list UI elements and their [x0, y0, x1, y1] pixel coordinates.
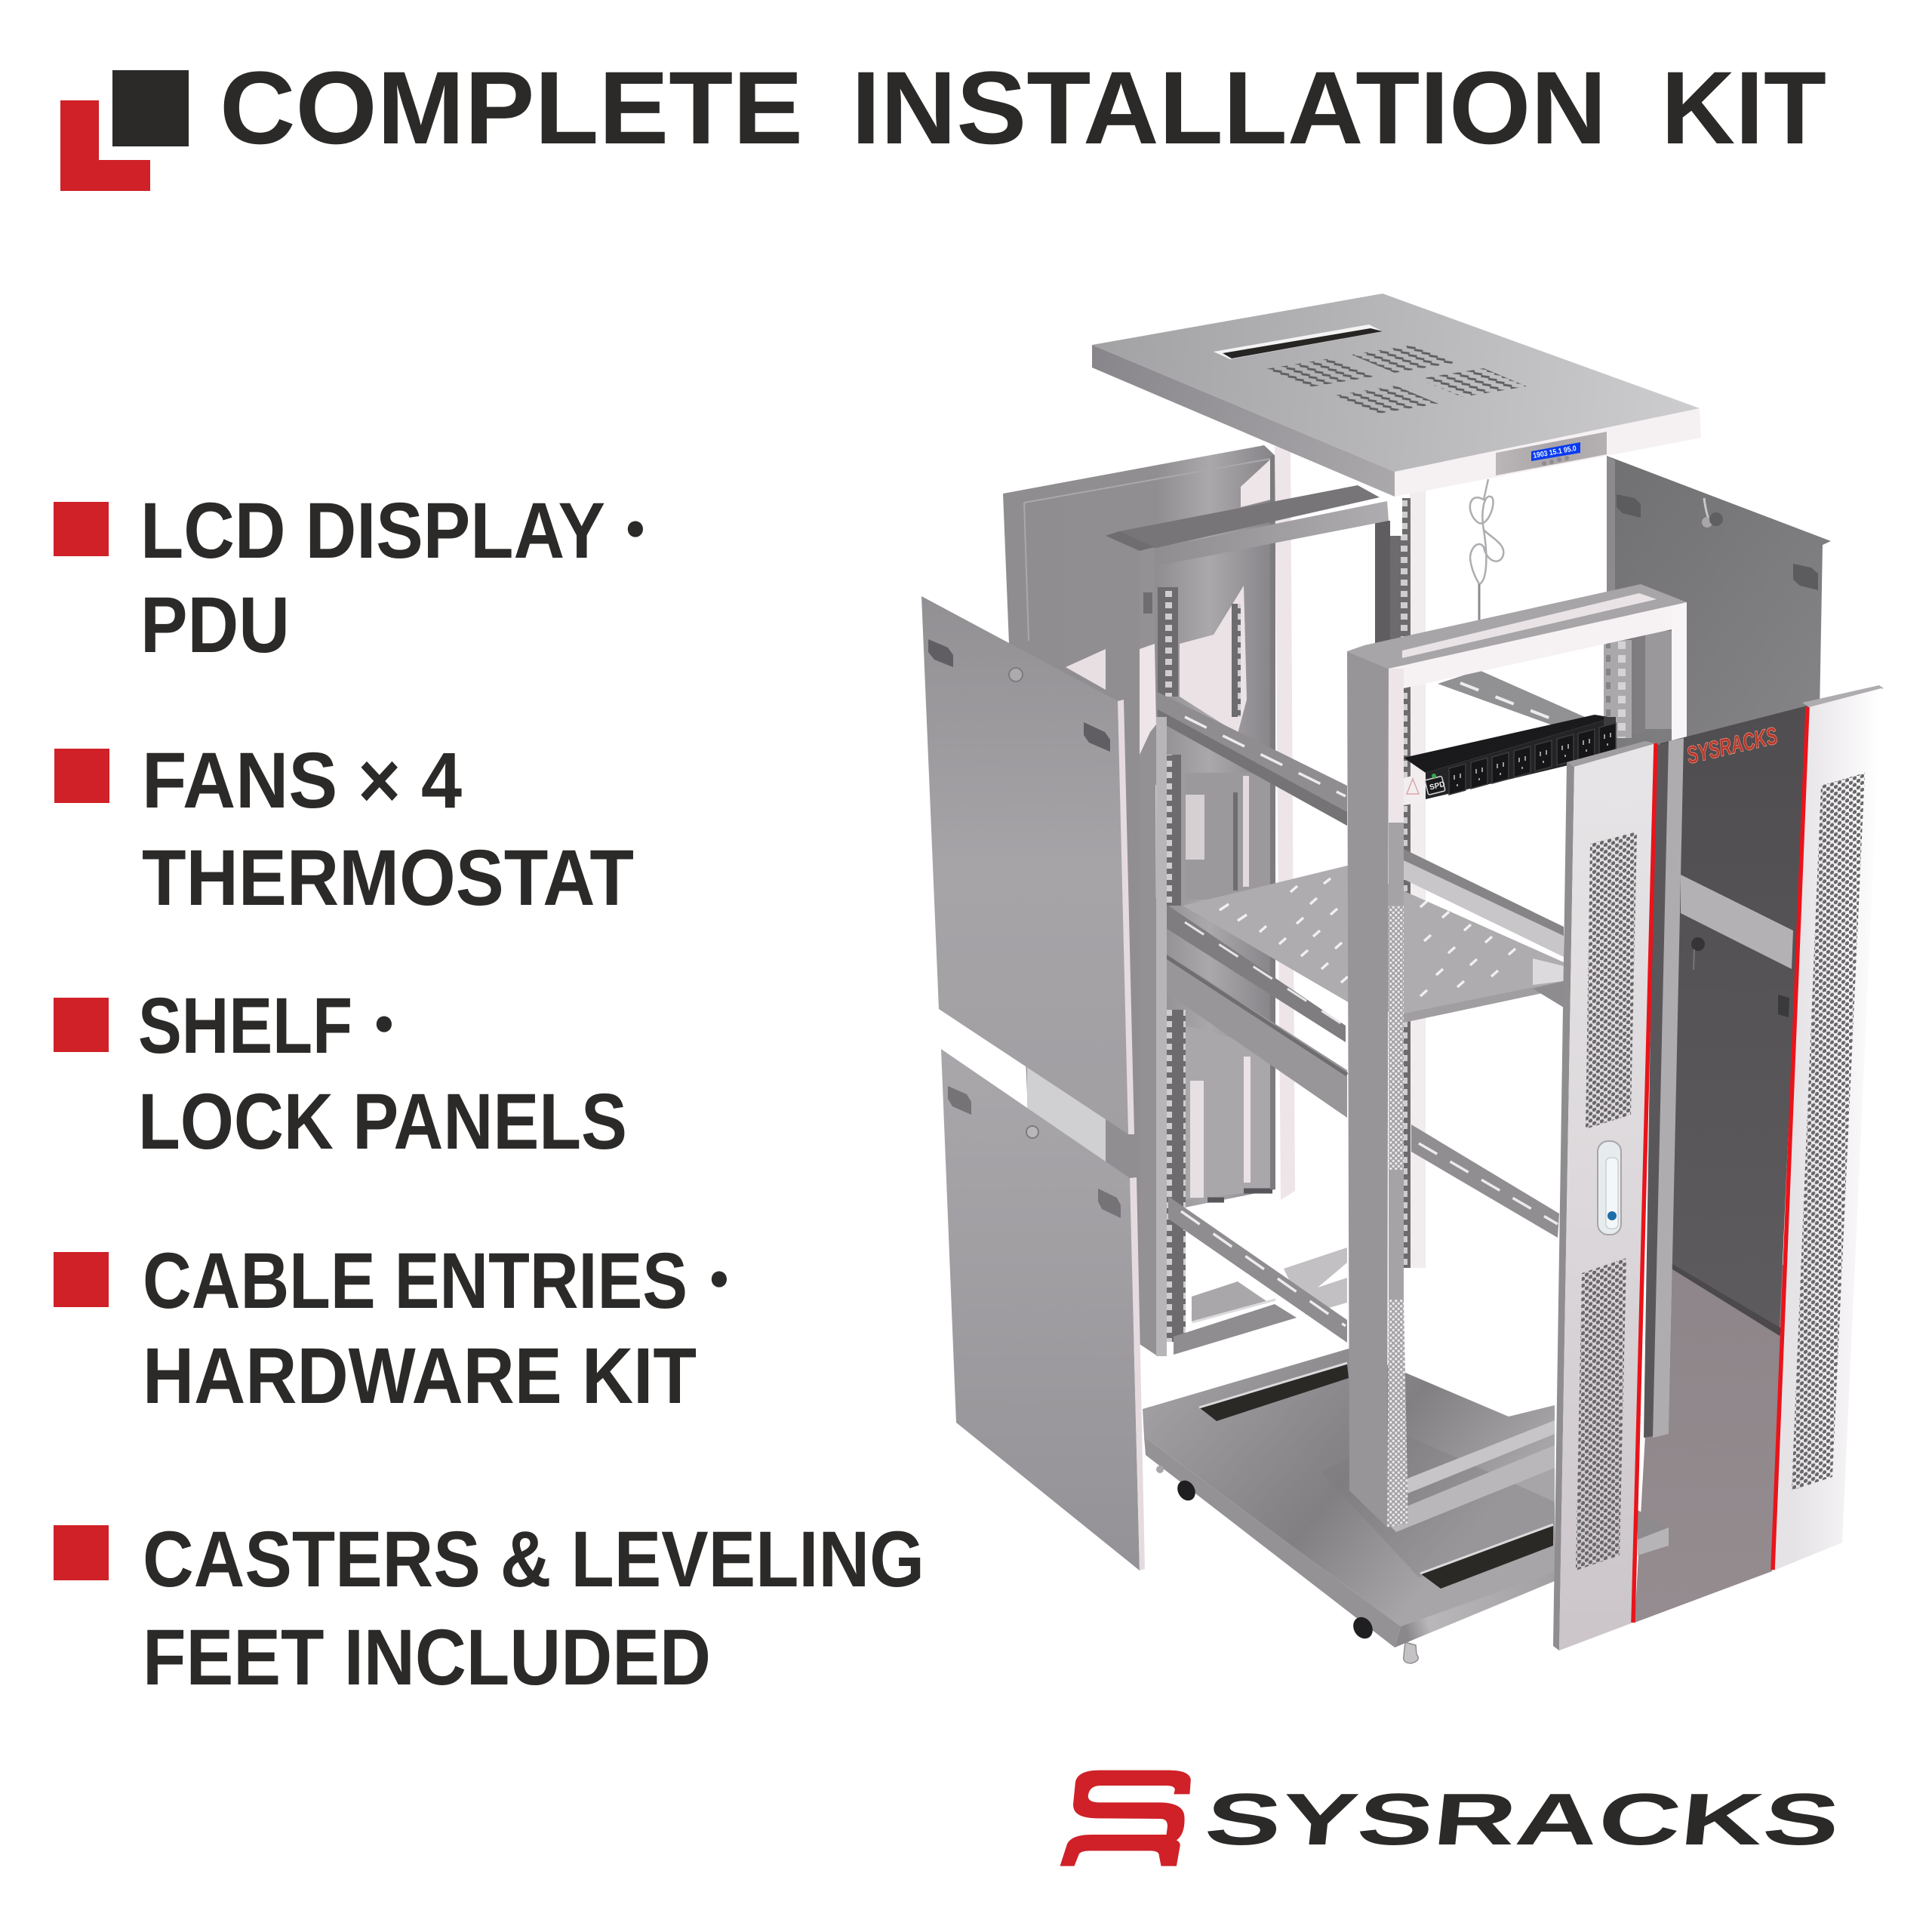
rack rail left — [1158, 587, 1241, 1342]
list item: cable entries and hardware kit: · — [694, 1214, 744, 1334]
outlets — [1449, 723, 1616, 795]
PDU power strip — [1404, 715, 1616, 805]
cable slot — [1214, 325, 1383, 359]
top cover lid — [1092, 294, 1701, 497]
brush cable entry front — [1420, 1524, 1553, 1589]
SPD badge: SPD — [1429, 780, 1446, 792]
fan vents — [1266, 344, 1527, 414]
thermostat wire — [1470, 479, 1503, 638]
list item: shelf and lock panels: SHELF — [138, 982, 352, 1070]
rear lower bracket — [1174, 1247, 1347, 1355]
lower left rail front bar — [1168, 1196, 1347, 1343]
door interior: dark upper section — [1660, 706, 1807, 1336]
lower left side panel — [941, 1049, 1145, 1571]
warning label — [1404, 773, 1423, 805]
shelf rails — [1147, 903, 1347, 1118]
rear left panel — [1003, 445, 1275, 1208]
wordmark: SYSRACKS — [1201, 1778, 1844, 1860]
list item: shelf and lock panels: · — [359, 958, 409, 1079]
list item: cable entries and hardware kit: HARDWARE KIT — [143, 1332, 697, 1420]
list item: LCD display and PDU — [54, 463, 660, 669]
base plate — [1143, 1349, 1555, 1647]
door right stile — [1772, 685, 1884, 1571]
list item: fans and thermostat: FANS × 4 — [142, 737, 462, 825]
rear right panel — [1607, 456, 1831, 755]
left frame top beam — [1106, 485, 1389, 566]
list item: LCD display and PDU: PDU — [140, 581, 290, 669]
LCD display module: 1903 15.1 95.0 — [1533, 445, 1577, 460]
title: KIT — [1661, 51, 1826, 166]
door interior: mauve lower section — [1635, 1208, 1789, 1623]
list item: casters and leveling feet: CASTERS & LEVELING — [143, 1515, 924, 1604]
right frame inner column — [1604, 631, 1672, 738]
title: COMPLETE — [220, 51, 803, 166]
list item: shelf and lock panels: LOCK PANELS — [138, 1078, 627, 1166]
shelf — [1183, 849, 1564, 1023]
list item: LCD display and PDU: LCD DISPLAY — [140, 487, 605, 575]
red stripe — [1633, 743, 1656, 1623]
upper left rail — [1158, 692, 1347, 826]
list item: cable entries and hardware kit: CABLE ENTRIES — [143, 1237, 688, 1325]
LCD display module — [1496, 432, 1607, 475]
illustration: exploded server rack — [921, 294, 1884, 1663]
list item: casters and leveling feet: FEET INCLUDED — [143, 1614, 711, 1702]
list item: fans and thermostat: THERMOSTAT — [142, 834, 634, 922]
door handle — [1598, 1141, 1621, 1235]
title — [220, 51, 1826, 166]
door inner gray bar — [1638, 738, 1684, 1555]
door logo: SYSRACKS — [1684, 721, 1780, 769]
upper left side panel — [921, 596, 1134, 1134]
list item: cable entries and hardware kit — [54, 1214, 744, 1420]
lower right rail — [1411, 1124, 1559, 1238]
SPD badge — [1425, 774, 1446, 795]
list item: shelf and lock panels — [54, 958, 627, 1166]
icon: logo mark — [1060, 1770, 1191, 1866]
door left stile — [1553, 741, 1656, 1651]
rear posts — [1275, 445, 1426, 1268]
casters and leveling feet — [1156, 1466, 1418, 1663]
list item: fans and thermostat — [54, 737, 634, 922]
list item: LCD display and PDU: · — [611, 463, 660, 584]
icon: header corner mark — [60, 70, 189, 191]
list item: casters and leveling feet — [54, 1515, 924, 1702]
brush cable entry rear — [1199, 1363, 1349, 1421]
title: INSTALLATION — [851, 51, 1607, 166]
logo: Sysracks — [1060, 1770, 1844, 1866]
rear upper rail — [1438, 670, 1585, 726]
right frame front post and arch — [1347, 584, 1687, 1527]
left frame post — [1106, 536, 1167, 1356]
